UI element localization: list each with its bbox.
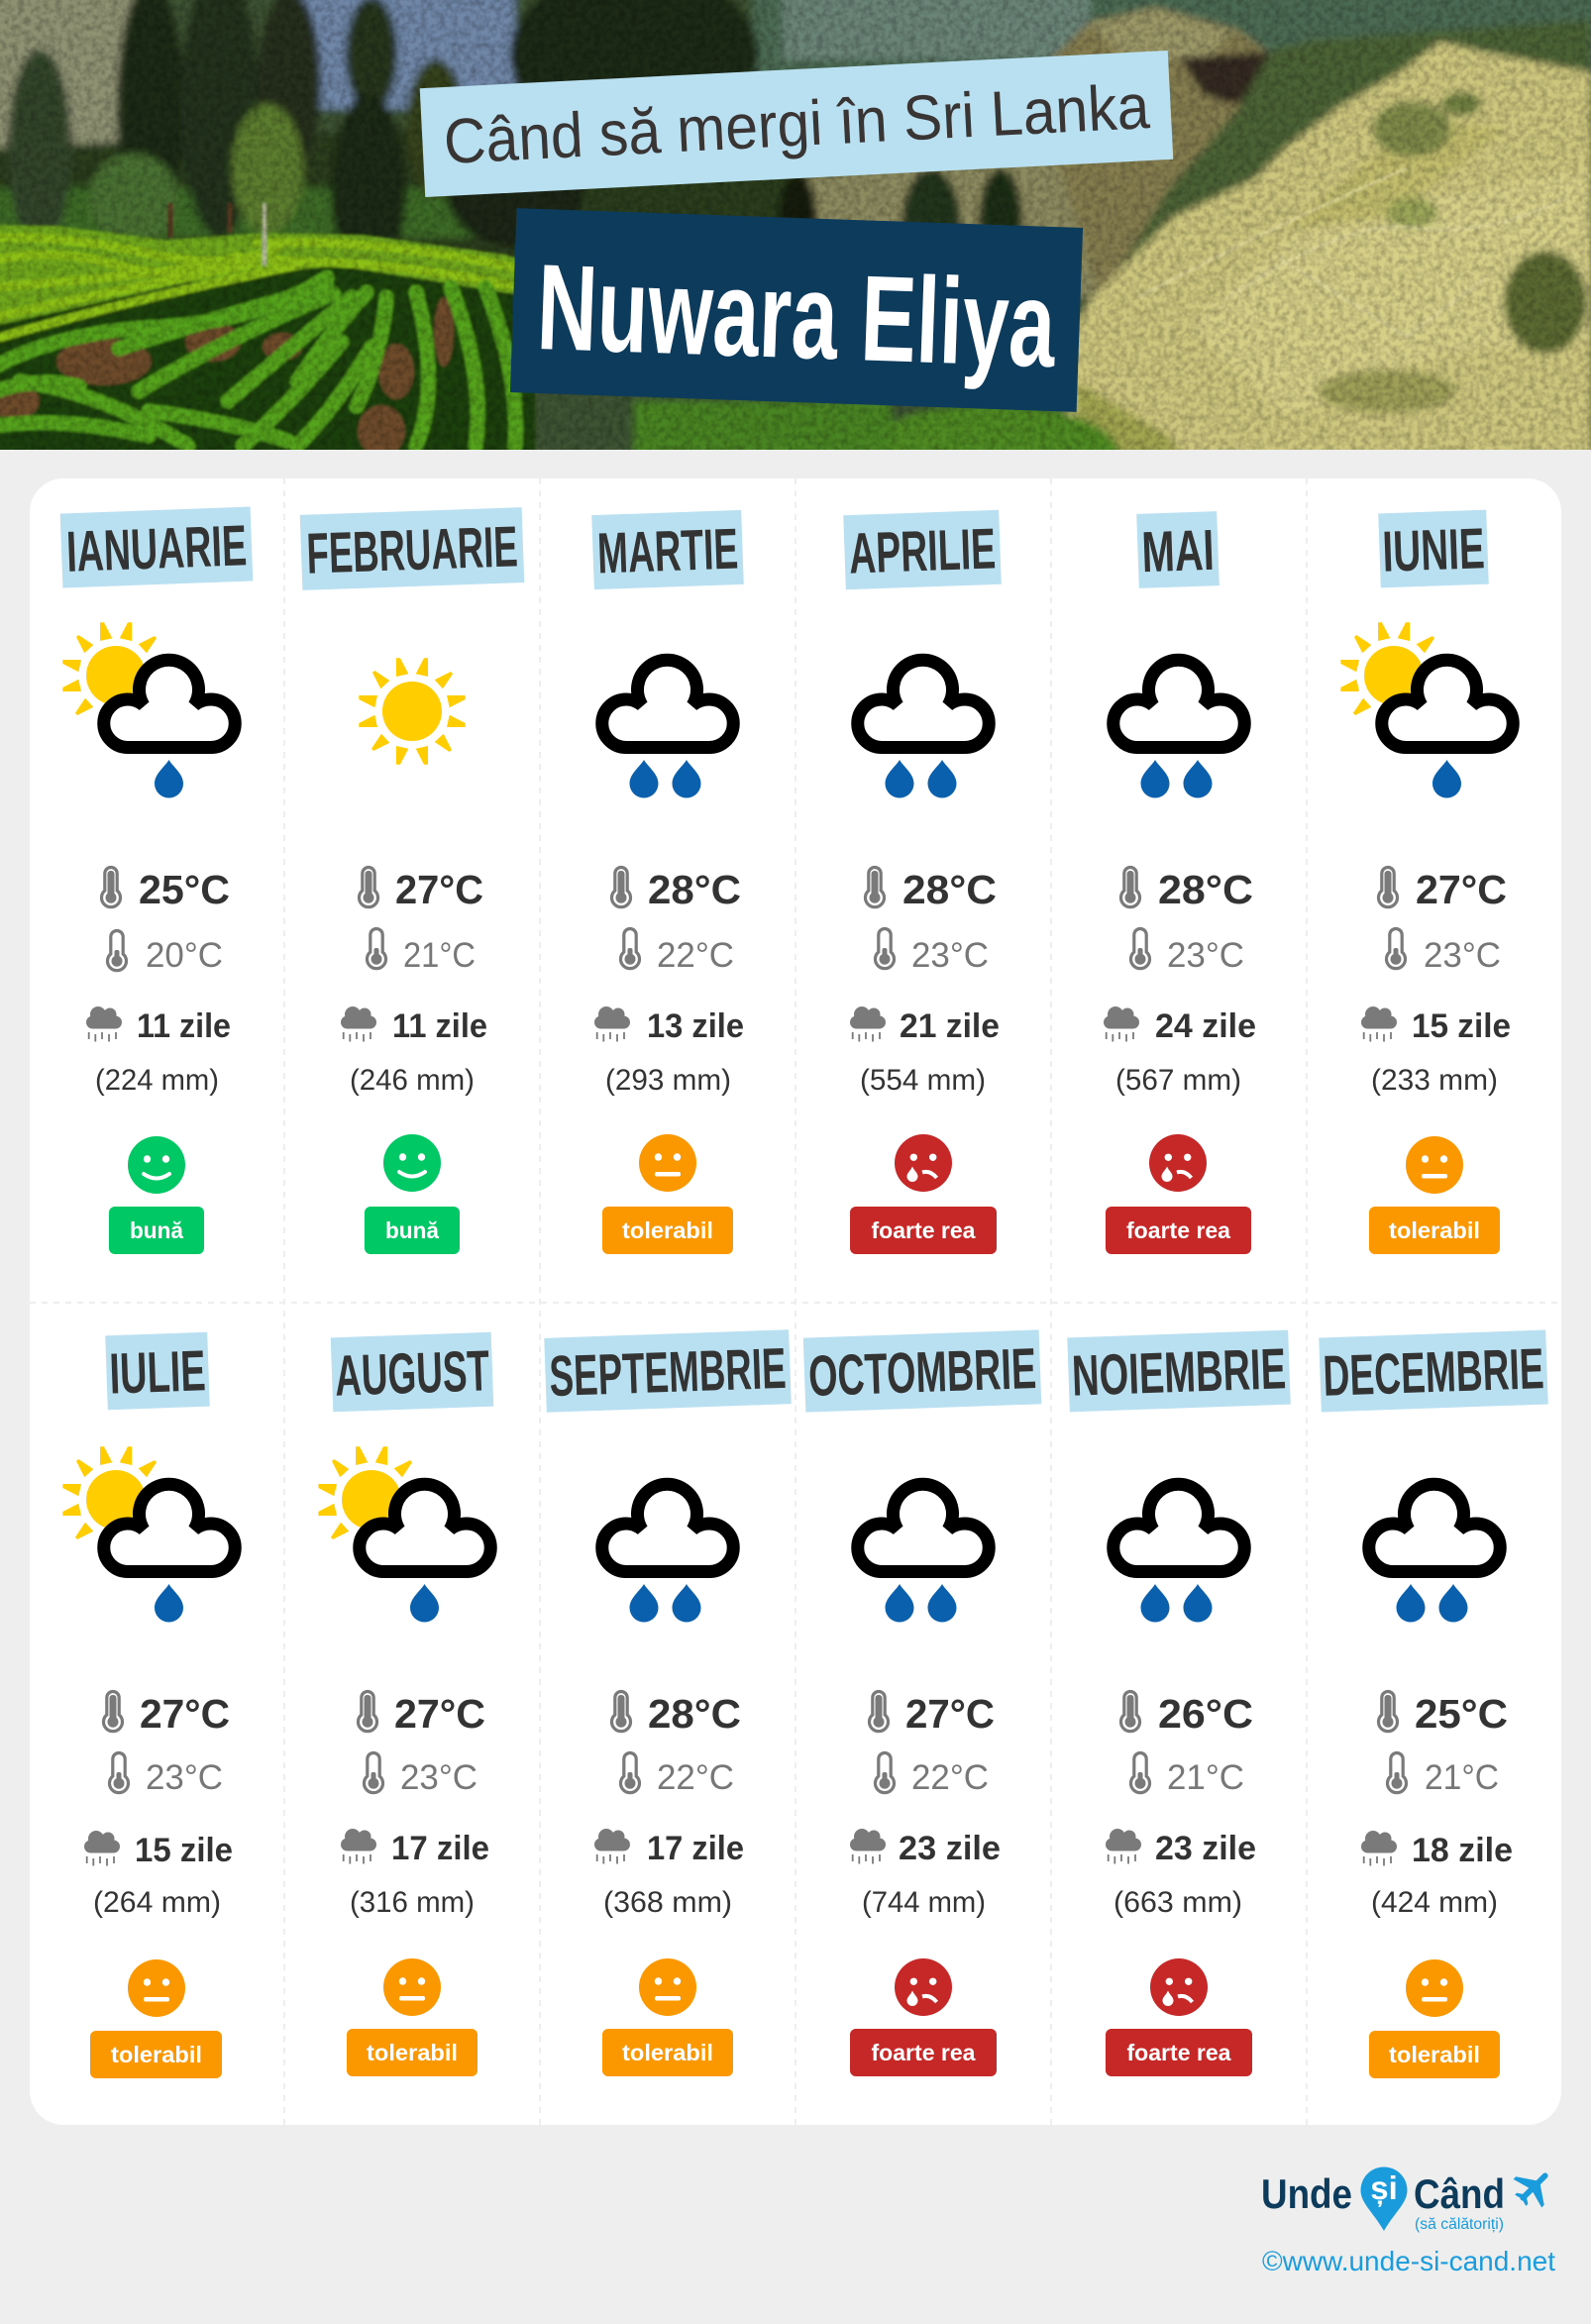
min temperature xyxy=(365,1753,477,1797)
rainfall: (233 mm) xyxy=(1371,1064,1498,1097)
icon: cloud, two drops xyxy=(858,660,989,798)
month: AUGUST xyxy=(318,1332,493,2076)
month label xyxy=(60,507,253,587)
rainfall: (424 mm) xyxy=(1371,1886,1498,1919)
min temperature: 22°C xyxy=(911,1758,989,1797)
min temperature xyxy=(1131,1753,1244,1797)
rating badge: tolerabil xyxy=(111,2042,202,2067)
month: OCTOMBRIE xyxy=(803,1329,1041,2076)
title banner xyxy=(510,208,1083,412)
rainy days xyxy=(86,1006,231,1045)
rating badge xyxy=(602,1207,733,1254)
month: SEPTEMBRIE xyxy=(544,1329,792,2076)
icon: sun, cloud, one drop xyxy=(318,1446,490,1623)
max temperature xyxy=(866,867,997,912)
month: FEBRUARIE xyxy=(300,507,524,1254)
rating face xyxy=(1149,1134,1207,1192)
min temperature: 22°C xyxy=(657,936,734,975)
month label: SEPTEMBRIE xyxy=(548,1336,788,1409)
month label xyxy=(843,510,1002,589)
rating face xyxy=(383,1958,441,2016)
logo word: Unde: Unde xyxy=(1261,2170,1352,2217)
website credit: ©www.unde-si-cand.net xyxy=(1262,2246,1555,2276)
rating badge xyxy=(602,2029,733,2076)
rainy days: 23 zile xyxy=(1155,1830,1256,1867)
min temperature xyxy=(1131,929,1244,975)
rating face xyxy=(1150,1958,1208,2016)
rainy days: 15 zile xyxy=(1412,1007,1511,1045)
rating badge xyxy=(109,1207,204,1254)
rating badge xyxy=(1106,2029,1252,2076)
month: IANUARIE xyxy=(60,507,253,1254)
icon: sun, cloud, one drop xyxy=(62,622,235,798)
month label: FEBRUARIE xyxy=(305,514,519,586)
rating badge: foarte rea xyxy=(1126,1217,1230,1243)
rating face xyxy=(128,1136,185,1194)
month label xyxy=(1136,511,1220,588)
month label xyxy=(1378,510,1489,587)
rating badge: tolerabil xyxy=(622,2040,713,2065)
rainy days: 24 zile xyxy=(1155,1007,1256,1045)
rating badge: foarte rea xyxy=(872,1217,976,1243)
month label xyxy=(1067,1330,1291,1412)
min temperature: 22°C xyxy=(657,1758,734,1797)
rating badge: tolerabil xyxy=(622,1217,713,1243)
max temperature: 28°C xyxy=(902,867,997,912)
rainy days xyxy=(1361,1831,1513,1869)
rainfall: (316 mm) xyxy=(350,1886,475,1919)
rainfall: (554 mm) xyxy=(860,1064,986,1097)
title banner: Nuwara Eliya xyxy=(535,240,1059,393)
rating badge: bună xyxy=(130,1217,183,1243)
rainfall: (744 mm) xyxy=(862,1886,986,1919)
rainy days xyxy=(594,1829,744,1867)
month label: APRILIE xyxy=(848,516,997,586)
rainy days xyxy=(341,1006,487,1045)
rating face xyxy=(1406,1959,1463,2017)
logo tagline: (să călătoriți) xyxy=(1415,2216,1504,2233)
icon: sun, cloud, one drop xyxy=(1340,622,1513,798)
max temperature xyxy=(1121,1691,1253,1737)
max temperature: 27°C xyxy=(395,867,483,912)
rainy days: 11 zile xyxy=(137,1007,231,1045)
max temperature: 26°C xyxy=(1158,1691,1253,1737)
rating badge xyxy=(1369,2031,1500,2078)
min temperature xyxy=(1387,929,1501,975)
month label: AUGUST xyxy=(334,1338,490,1409)
max temperature: 25°C xyxy=(139,867,230,912)
month: MARTIE xyxy=(591,510,744,1254)
month label: IANUARIE xyxy=(65,513,248,584)
rainy days: 21 zile xyxy=(900,1007,1000,1045)
rainfall: (368 mm) xyxy=(603,1886,732,1919)
rainfall: (293 mm) xyxy=(605,1064,731,1097)
max temperature: 25°C xyxy=(1415,1691,1508,1737)
icon: cloud, two drops xyxy=(1369,1484,1500,1623)
max temperature xyxy=(359,867,483,912)
min temperature xyxy=(876,1753,989,1797)
month: DECEMBRIE xyxy=(1319,1330,1548,2078)
rating face xyxy=(383,1134,441,1192)
month label xyxy=(105,1332,210,1410)
rainfall: (224 mm) xyxy=(95,1064,219,1097)
min temperature xyxy=(876,929,989,975)
month label: NOIEMBRIE xyxy=(1071,1336,1287,1409)
max temperature xyxy=(1121,867,1253,912)
rating badge: foarte rea xyxy=(872,2040,976,2065)
min temperature xyxy=(620,1753,734,1797)
rainy days xyxy=(1104,1006,1256,1045)
hero photo: tea hills of Nuwara Eliya xyxy=(0,0,1591,450)
rating badge xyxy=(1106,1207,1251,1254)
icon: cloud, two drops xyxy=(1114,1484,1244,1623)
month: IUNIE xyxy=(1340,510,1513,1254)
month label xyxy=(803,1329,1041,1413)
min temperature xyxy=(620,929,734,975)
rainy days: 17 zile xyxy=(391,1830,489,1867)
rating badge: tolerabil xyxy=(1389,2042,1480,2067)
rainy days: 18 zile xyxy=(1412,1832,1513,1869)
rainfall: (567 mm) xyxy=(1115,1064,1241,1097)
icon: map pin xyxy=(1361,2167,1407,2231)
month label xyxy=(544,1329,792,1413)
rainy days xyxy=(84,1831,233,1869)
icon: sun, cloud, one drop xyxy=(62,1446,235,1623)
rating face xyxy=(639,1134,696,1192)
min temperature: 23°C xyxy=(400,1758,477,1797)
min temperature: 23°C xyxy=(1167,936,1244,975)
rating badge: foarte rea xyxy=(1127,2040,1231,2065)
min temperature xyxy=(367,929,476,975)
max temperature: 28°C xyxy=(648,867,741,912)
max temperature: 27°C xyxy=(905,1691,995,1737)
rating badge xyxy=(850,1207,997,1254)
rating face xyxy=(128,1959,185,2017)
max temperature: 27°C xyxy=(1416,867,1507,912)
min temperature: 20°C xyxy=(146,936,223,975)
rainy days xyxy=(850,1006,1000,1045)
rainy days: 23 zile xyxy=(899,1830,1001,1867)
rating face xyxy=(895,1134,952,1192)
min temperature: 21°C xyxy=(1167,1758,1244,1797)
min temperature xyxy=(107,931,223,975)
month label: IULIE xyxy=(108,1338,207,1407)
icon: sun xyxy=(359,658,466,765)
month label xyxy=(331,1332,493,1412)
icon: cloud, two drops xyxy=(602,660,733,798)
month: NOIEMBRIE xyxy=(1067,1330,1291,2076)
rainfall: (663 mm) xyxy=(1114,1886,1242,1919)
subtitle banner: Când să mergi în Sri Lanka xyxy=(442,70,1151,177)
rainfall: (246 mm) xyxy=(350,1064,475,1097)
rating badge xyxy=(1369,1207,1500,1254)
min temperature: 23°C xyxy=(146,1758,223,1797)
month label xyxy=(591,510,744,589)
month label: MAI xyxy=(1140,518,1216,584)
icon: airplane xyxy=(1507,2160,1561,2214)
month: APRILIE xyxy=(843,510,1002,1254)
icon: map pin: și xyxy=(1370,2169,1398,2207)
icon: cloud, two drops xyxy=(1114,660,1244,798)
min temperature xyxy=(1387,1753,1499,1797)
month: IULIE xyxy=(62,1332,235,2078)
rating badge xyxy=(347,2029,477,2076)
calendar card xyxy=(30,478,1561,2125)
rainy days: 17 zile xyxy=(647,1830,744,1867)
logo: Unde și Când xyxy=(1261,2160,1561,2233)
icon: cloud, two drops xyxy=(858,1484,989,1623)
rainy days: 15 zile xyxy=(135,1832,233,1869)
month label: MARTIE xyxy=(596,517,739,585)
rating badge: bună xyxy=(385,1217,439,1243)
month label: IUNIE xyxy=(1381,516,1486,584)
rating badge: tolerabil xyxy=(367,2040,458,2065)
month: MAI xyxy=(1104,511,1256,1254)
min temperature: 23°C xyxy=(1424,936,1501,975)
min temperature: 21°C xyxy=(403,936,476,975)
rainy days xyxy=(850,1829,1001,1867)
max temperature: 27°C xyxy=(394,1691,485,1737)
rainfall: (264 mm) xyxy=(93,1886,221,1919)
min temperature xyxy=(109,1753,223,1797)
rating face xyxy=(639,1958,696,2016)
rainy days xyxy=(1106,1829,1256,1867)
rating badge xyxy=(90,2031,222,2078)
rainy days xyxy=(594,1006,744,1045)
rating badge: tolerabil xyxy=(1389,1217,1480,1243)
min temperature: 21°C xyxy=(1425,1758,1499,1797)
rainy days: 13 zile xyxy=(647,1007,744,1045)
rainy days xyxy=(1361,1006,1511,1045)
max temperature: 28°C xyxy=(1158,867,1253,912)
max temperature: 27°C xyxy=(140,1691,230,1737)
rating face xyxy=(1406,1136,1463,1194)
month label xyxy=(300,507,524,590)
min temperature: 23°C xyxy=(911,936,989,975)
rating badge xyxy=(365,1207,460,1254)
icon: cloud, two drops xyxy=(602,1484,733,1623)
rainy days xyxy=(341,1829,489,1867)
logo word: Când: Când xyxy=(1414,2170,1505,2217)
month label: OCTOMBRIE xyxy=(807,1336,1037,1409)
rating badge xyxy=(850,2029,997,2076)
rainy days: 11 zile xyxy=(392,1007,487,1045)
max temperature: 28°C xyxy=(648,1691,741,1737)
rating face xyxy=(895,1958,952,2016)
